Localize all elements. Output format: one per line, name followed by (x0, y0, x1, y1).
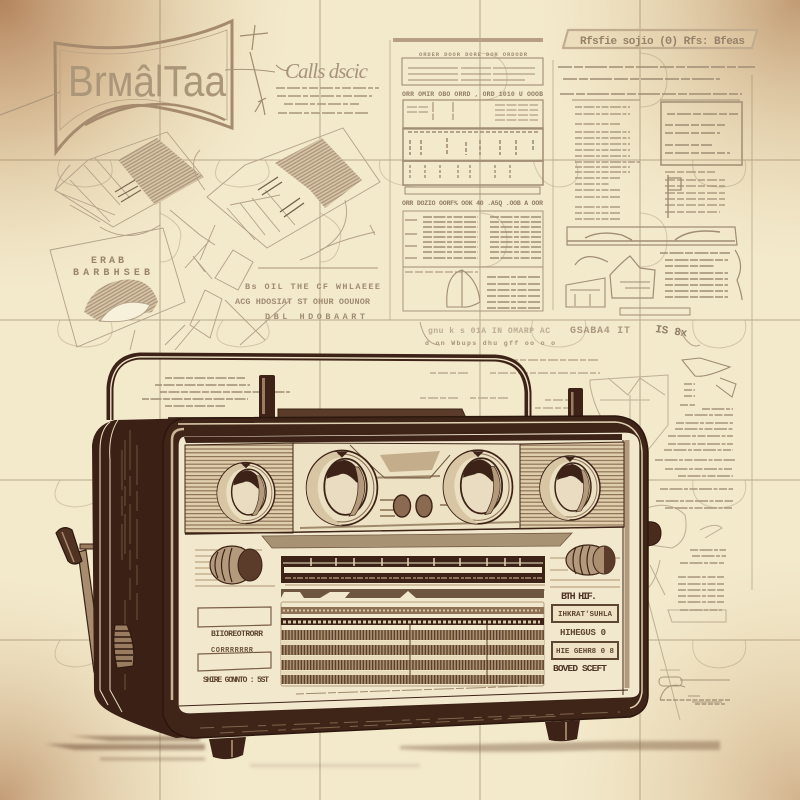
text block: caption lines: DBL HDOBAART (265, 312, 365, 322)
floor shadows (45, 736, 720, 767)
side grip wheel (114, 625, 134, 668)
sketch: book with arch (50, 228, 185, 347)
panel: right newspaper column (558, 30, 757, 315)
dial 3 (444, 450, 512, 524)
sketch: keyboard diagram left (55, 132, 205, 236)
upper speaker section (185, 442, 624, 534)
left label group: BIIOREOTRORR (211, 630, 263, 639)
dial 2 (307, 451, 377, 525)
tuning display (281, 556, 545, 583)
text block: caption lines: ACG HDOSIAT ST OHUR OOUNOR (235, 297, 371, 307)
radio front frame (163, 416, 648, 738)
text band above radio: IS 8x (654, 324, 688, 340)
top plate (278, 409, 466, 418)
right label group: BOVED SCEFT (553, 663, 607, 674)
text band above radio (420, 322, 700, 408)
horizontal panel rules (195, 550, 620, 590)
dial 1 (217, 463, 275, 523)
cream panel (178, 432, 640, 714)
text block: caption lines (235, 268, 380, 322)
panel: left newspaper column: ORR OMIR OBO ORRD , ORD 1010 U OOOB (402, 91, 543, 98)
column heading: ORDER DOOR DORE DOR ORDODR (419, 51, 528, 58)
speaker grille (281, 589, 544, 686)
radio feet (209, 720, 580, 759)
small oval buttons (394, 495, 432, 517)
text block: script note: Calls dscic (285, 59, 369, 83)
side knob (645, 522, 661, 546)
panel: left newspaper column: ORR DOZIO OORF% OOK 40 .A5Q .OOB A OOR (402, 200, 543, 207)
text block: script note (276, 59, 379, 113)
text band above radio: GSABA4 IT (570, 326, 630, 337)
column title plate (563, 30, 757, 48)
sketch: book with arch: ERAB (91, 256, 124, 267)
radio handle (110, 356, 529, 426)
text block behind handle (142, 378, 290, 406)
icon: compass star doodle (240, 25, 268, 115)
left knob (210, 546, 262, 584)
sketch: cards and pen (130, 210, 290, 350)
panel: right side notes (655, 384, 735, 704)
right label group: BTH HIF. (561, 592, 597, 603)
right label group: HIHEGUS 0 (560, 628, 606, 638)
banner title sketch (0, 21, 275, 152)
dial 4 (540, 456, 600, 520)
left label group: CORRRRRRR (211, 647, 254, 655)
antenna posts (259, 375, 583, 420)
title text: BrмâlTaa (68, 57, 226, 106)
text band above radio: gnu k s 01A IN OMARP AC (428, 327, 550, 336)
right label group (552, 592, 618, 674)
right label group: HIE GEHR8 0 8 (556, 648, 614, 656)
right knob (566, 545, 615, 575)
left label group (198, 607, 530, 694)
sketch: book with arch: BARBHSEB (73, 268, 150, 279)
panel: left newspaper column (393, 40, 543, 311)
text band above radio: d on Wbups dhu gff oo o o (425, 340, 555, 347)
lever (56, 528, 110, 672)
left label group: SHIRE GONNTO : 5ST (203, 676, 269, 685)
column title plate: Rfsfie sojio (Θ) Rfs: Bfeas (580, 36, 745, 48)
sketch: keyboard diagram right (207, 128, 380, 260)
radio (56, 356, 661, 759)
scale strip (262, 533, 572, 548)
sketch: map diagrams right of radio (590, 358, 736, 720)
text block: caption lines: Bs OIL THE CF WHLAEEE (245, 282, 380, 292)
radio body side (92, 418, 200, 738)
right label group: IHKRAT'SUHLA (558, 611, 612, 619)
